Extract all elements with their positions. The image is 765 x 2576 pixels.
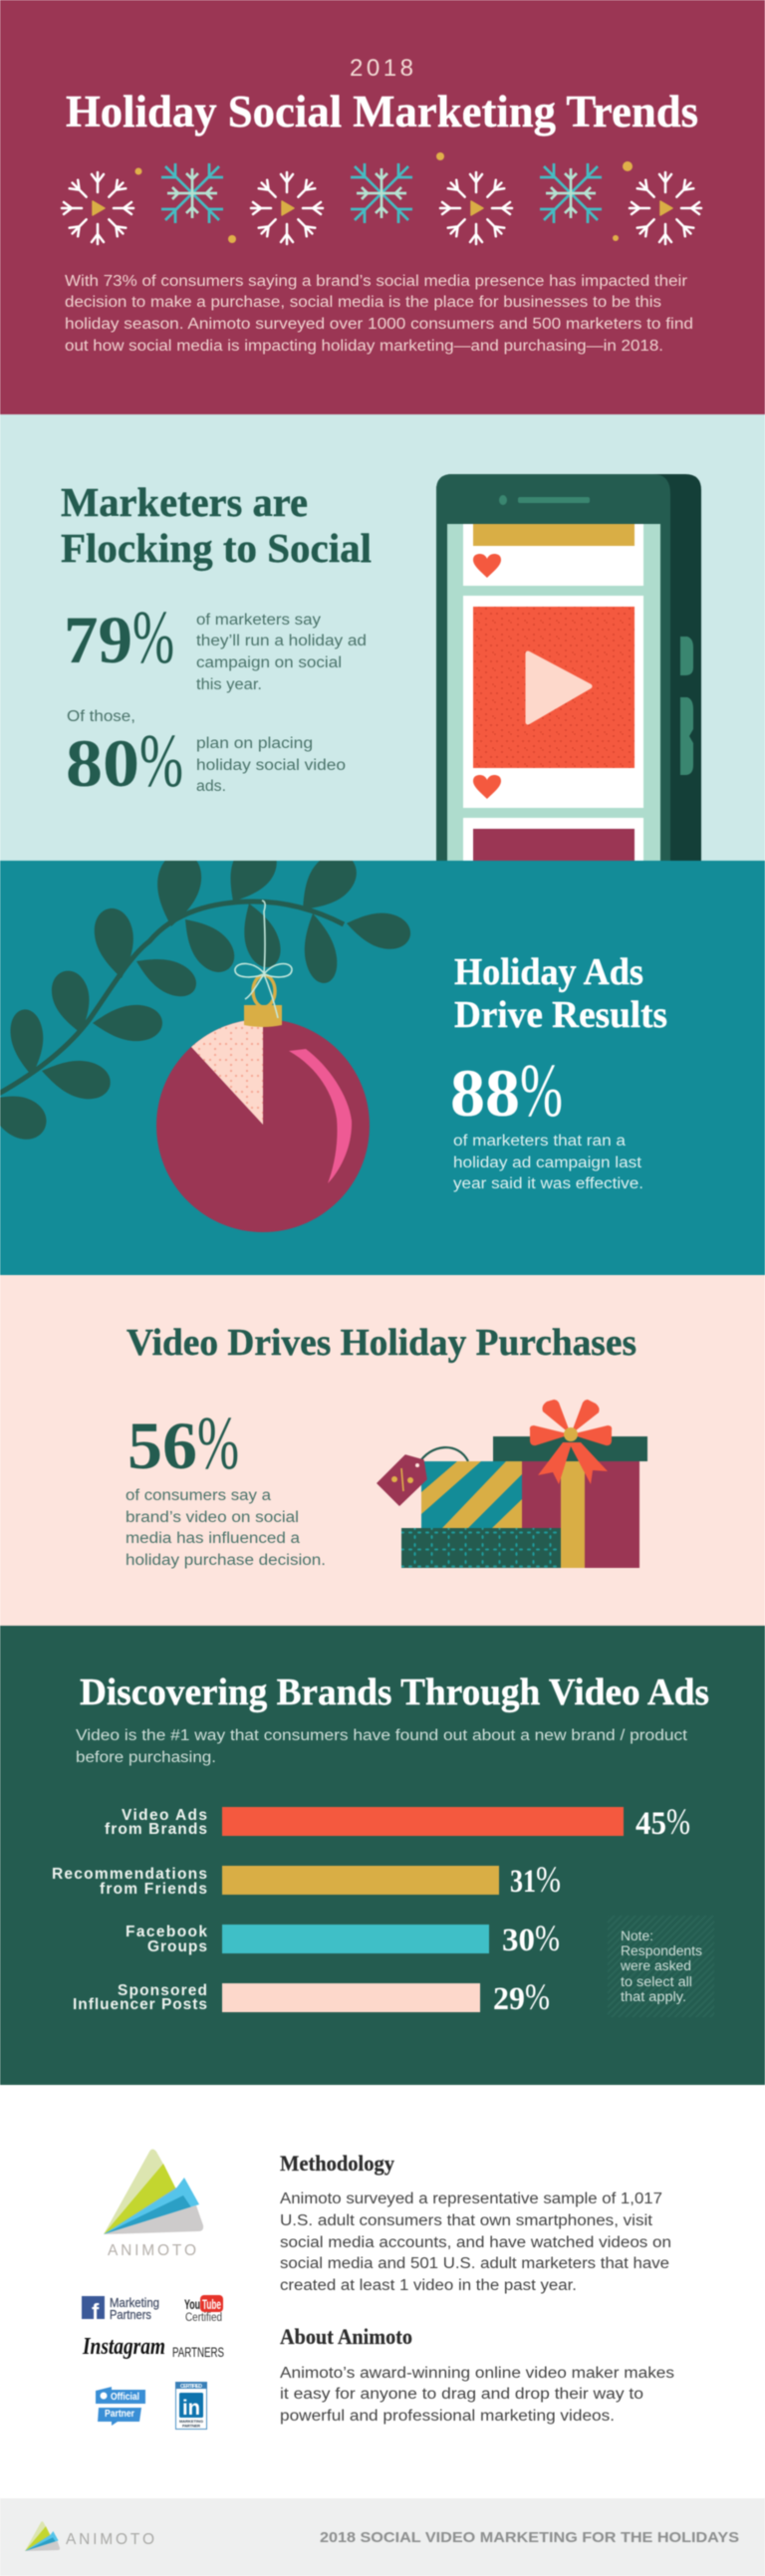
gold dots bbox=[135, 152, 633, 243]
stat text: 79% bbox=[196, 612, 367, 693]
note box: to select all bbox=[621, 1974, 692, 1989]
stat text: 79%: campaign on social bbox=[196, 654, 342, 671]
methodology heading: Methodology bbox=[280, 2151, 394, 2176]
bar: video ads from brands: from Brands bbox=[105, 1821, 207, 1838]
subheading: Video is the #1 way that consumers have found out about a new brand / product bbox=[76, 1727, 688, 1744]
badge: youtube certified bbox=[184, 2295, 223, 2324]
stat: 80% bbox=[66, 719, 183, 803]
badge: facebook marketing partners: f bbox=[92, 2299, 100, 2324]
about animoto heading: About Animoto bbox=[280, 2324, 412, 2349]
about animoto text bbox=[280, 2365, 674, 2425]
bar chart bbox=[52, 1802, 690, 2018]
stat: 88% bbox=[450, 1049, 563, 1133]
string and bow bbox=[235, 901, 292, 1018]
note box: Note: bbox=[621, 1929, 653, 1943]
animoto logo bbox=[104, 2150, 203, 2259]
stat: 79% bbox=[64, 596, 174, 679]
panel: discovering brands through video ads bbox=[0, 1626, 765, 2085]
post card 1 bbox=[463, 524, 643, 586]
bar: facebook groups: Facebook bbox=[126, 1924, 207, 1940]
bar: video ads from brands: 45 bbox=[636, 1806, 666, 1842]
badge: linkedin certified bbox=[175, 2382, 207, 2429]
heading: Video Drives Holiday Purchases bbox=[127, 1322, 637, 1364]
about animoto text: Animoto’s award-winning online video maker makes bbox=[280, 2365, 674, 2382]
of those label: Of those, bbox=[67, 708, 135, 725]
subheading: before purchasing. bbox=[76, 1749, 216, 1766]
bar: sponsored influencer posts: Influencer Posts bbox=[73, 1996, 207, 2013]
heading bbox=[454, 951, 667, 1036]
lid bbox=[493, 1436, 647, 1461]
icon: white snowflake 1 bbox=[62, 172, 133, 244]
play icon bbox=[528, 653, 590, 722]
stat text: 56%: of consumers say a bbox=[126, 1487, 271, 1504]
panel: about bbox=[0, 2085, 765, 2499]
bar: sponsored influencer posts: 29 bbox=[493, 1981, 525, 2017]
stat text: 56% bbox=[126, 1487, 326, 1569]
price tag bbox=[378, 1455, 426, 1505]
icon: white snowflake 4 bbox=[630, 172, 701, 244]
panel: header bbox=[0, 0, 765, 414]
stat: 56% bbox=[128, 1402, 239, 1485]
animoto logo: ANIMOTO bbox=[108, 2242, 196, 2259]
methodology text bbox=[280, 2190, 671, 2294]
illustration: phone bbox=[436, 474, 701, 861]
stat text: 88%: year said it was effective. bbox=[453, 1175, 643, 1192]
striped bag bbox=[421, 1461, 522, 1528]
phone side buttons bbox=[680, 637, 693, 775]
patterned box bbox=[401, 1528, 561, 1568]
heading: Drive Results bbox=[454, 994, 667, 1036]
methodology text: Animoto surveyed a representative sample of 1,017 bbox=[280, 2190, 662, 2207]
stat: 80%: 80 bbox=[66, 725, 139, 801]
badge: linkedin certified: PARTNER bbox=[182, 2423, 200, 2429]
bar: recommendations from friends: from Friends bbox=[100, 1881, 207, 1898]
ornament highlight bbox=[289, 1049, 352, 1183]
intro paragraph: With 73% of consumers saying a brand’s social media presence has impacted their bbox=[65, 273, 687, 290]
bar: recommendations from friends bbox=[52, 1860, 561, 1901]
footer logo: ANIMOTO bbox=[66, 2531, 154, 2548]
year: 2018 bbox=[350, 55, 413, 82]
stat: 79%: % bbox=[132, 596, 174, 679]
bar: sponsored influencer posts: % bbox=[525, 1977, 550, 2018]
badge: facebook marketing partners bbox=[82, 2295, 159, 2324]
stat text: 88%: holiday ad campaign last bbox=[453, 1155, 642, 1171]
badge: twitter official partner: Official bbox=[111, 2391, 139, 2403]
footer bbox=[0, 2498, 765, 2576]
icon: white snowflake 2 bbox=[251, 172, 323, 244]
badge: facebook marketing partners: Marketing bbox=[110, 2295, 159, 2310]
intro paragraph bbox=[65, 273, 693, 355]
stat text: 80%: holiday social video bbox=[196, 757, 346, 774]
badge: youtube certified: Certified bbox=[185, 2312, 222, 2324]
title: Holiday Social Marketing Trends bbox=[66, 87, 698, 136]
stat text: 56%: holiday purchase decision. bbox=[126, 1552, 326, 1569]
methodology text: created at least 1 video in the past year. bbox=[280, 2277, 577, 2294]
about animoto text: it easy for anyone to drag and drop their way to bbox=[280, 2386, 643, 2403]
bar: facebook groups: Groups bbox=[147, 1938, 207, 1955]
panel: video drives holiday purchases bbox=[0, 1275, 765, 1626]
methodology text: social media accounts, and have watched videos on bbox=[280, 2234, 671, 2251]
note box: that apply. bbox=[621, 1989, 686, 2004]
stat text: 80% bbox=[196, 735, 346, 795]
stat: 56%: % bbox=[197, 1402, 239, 1485]
icon: teal snowflake 1 bbox=[161, 163, 223, 223]
bar: sponsored influencer posts: Sponsored bbox=[118, 1982, 207, 1999]
bar: facebook groups: 30 bbox=[502, 1923, 535, 1958]
methodology text: U.S. adult consumers that own smartphones, visit bbox=[280, 2212, 653, 2229]
bar: video ads from brands: % bbox=[666, 1802, 690, 1843]
heading bbox=[61, 479, 372, 571]
post card 2: video bbox=[463, 596, 643, 808]
footer logo bbox=[25, 2521, 154, 2551]
badge: youtube certified: Tube bbox=[202, 2296, 221, 2312]
pie slice: 12% bbox=[191, 1019, 263, 1125]
bar: recommendations from friends: 31 bbox=[510, 1864, 536, 1900]
heading: Discovering Brands Through Video Ads bbox=[80, 1672, 709, 1713]
badge: linkedin certified: MARKETING bbox=[179, 2419, 203, 2424]
illustration: gifts bbox=[378, 1400, 647, 1568]
post card 3 bbox=[463, 818, 643, 861]
heading: Flocking to Social bbox=[61, 525, 372, 571]
stat text: 79%: of marketers say bbox=[196, 612, 321, 629]
snowflake row bbox=[62, 152, 701, 244]
illustration: branch bbox=[0, 861, 410, 1140]
stat text: 56%: media has influenced a bbox=[126, 1530, 300, 1547]
bow bbox=[530, 1400, 612, 1484]
intro paragraph: holiday season. Animoto surveyed over 1000 consumers and 500 marketers to find bbox=[65, 316, 693, 333]
bar: facebook groups: % bbox=[535, 1919, 560, 1959]
bar: video ads from brands: Video Ads bbox=[122, 1807, 207, 1824]
intro paragraph: out how social media is impacting holiday marketing—and purchasing—in 2018. bbox=[65, 338, 663, 355]
heading: Marketers are bbox=[61, 479, 308, 525]
stat: 80%: % bbox=[139, 719, 183, 803]
panel: marketers are flocking to social bbox=[0, 414, 765, 861]
badge: twitter official partner: Partner bbox=[105, 2408, 134, 2420]
bar: recommendations from friends: Recommendations bbox=[52, 1866, 207, 1883]
stat: 56%: 56 bbox=[128, 1408, 197, 1483]
badge: linkedin certified: CERTIFIED bbox=[180, 2384, 202, 2390]
about animoto text: powerful and professional marketing videos. bbox=[280, 2408, 615, 2425]
badge: instagram partners: Instagram bbox=[82, 2334, 165, 2360]
ornament cap bbox=[244, 1005, 282, 1027]
stat text: 88% bbox=[453, 1133, 643, 1192]
intro paragraph: decision to make a purchase, social media is the place for businesses to be this bbox=[65, 294, 661, 311]
stat text: 79%: they’ll run a holiday ad bbox=[196, 633, 367, 649]
stat text: 79%: this year. bbox=[196, 676, 262, 693]
bar: sponsored influencer posts bbox=[73, 1977, 550, 2018]
gift box bbox=[522, 1461, 639, 1568]
ribbon bbox=[561, 1461, 585, 1568]
illustration: ornament pie chart bbox=[156, 901, 370, 1232]
badge: twitter official partner bbox=[96, 2387, 145, 2426]
note box bbox=[608, 1916, 714, 2017]
icon: teal snowflake 3 bbox=[540, 163, 602, 223]
methodology text: social media and 501 U.S. adult marketers that have bbox=[280, 2255, 669, 2272]
badge: instagram partners: PARTNERS bbox=[172, 2344, 224, 2360]
badge: youtube certified: You bbox=[184, 2296, 200, 2312]
icon: white snowflake 3 bbox=[440, 172, 512, 244]
panel: holiday ads drive results bbox=[0, 835, 765, 1275]
footer title: 2018 SOCIAL VIDEO MARKETING FOR THE HOLIDAYS bbox=[320, 2529, 739, 2546]
bar: facebook groups bbox=[126, 1919, 560, 1959]
icon: teal snowflake 2 bbox=[351, 163, 412, 223]
stat text: 80%: plan on placing bbox=[196, 735, 313, 752]
phone camera and speaker bbox=[499, 495, 590, 505]
stat text: 56%: brand’s video on social bbox=[126, 1509, 299, 1526]
badge: facebook marketing partners: Partners bbox=[110, 2307, 151, 2322]
badge: linkedin certified: in bbox=[182, 2397, 200, 2420]
heading: Holiday Ads bbox=[454, 951, 643, 993]
bag handle bbox=[418, 1447, 468, 1464]
subheading bbox=[76, 1727, 688, 1766]
note box: were asked bbox=[620, 1958, 691, 1973]
stat: 88%: 88 bbox=[450, 1055, 520, 1131]
stat text: 80%: ads. bbox=[196, 778, 226, 795]
stat text: 88%: of marketers that ran a bbox=[453, 1133, 626, 1150]
stat: 88%: % bbox=[520, 1049, 563, 1133]
stat: 79%: 79 bbox=[64, 602, 132, 677]
bar: recommendations from friends: % bbox=[536, 1860, 561, 1901]
bar: video ads from brands bbox=[105, 1802, 690, 1843]
ornament ring bbox=[253, 975, 275, 1007]
note box: Respondents bbox=[621, 1943, 702, 1958]
